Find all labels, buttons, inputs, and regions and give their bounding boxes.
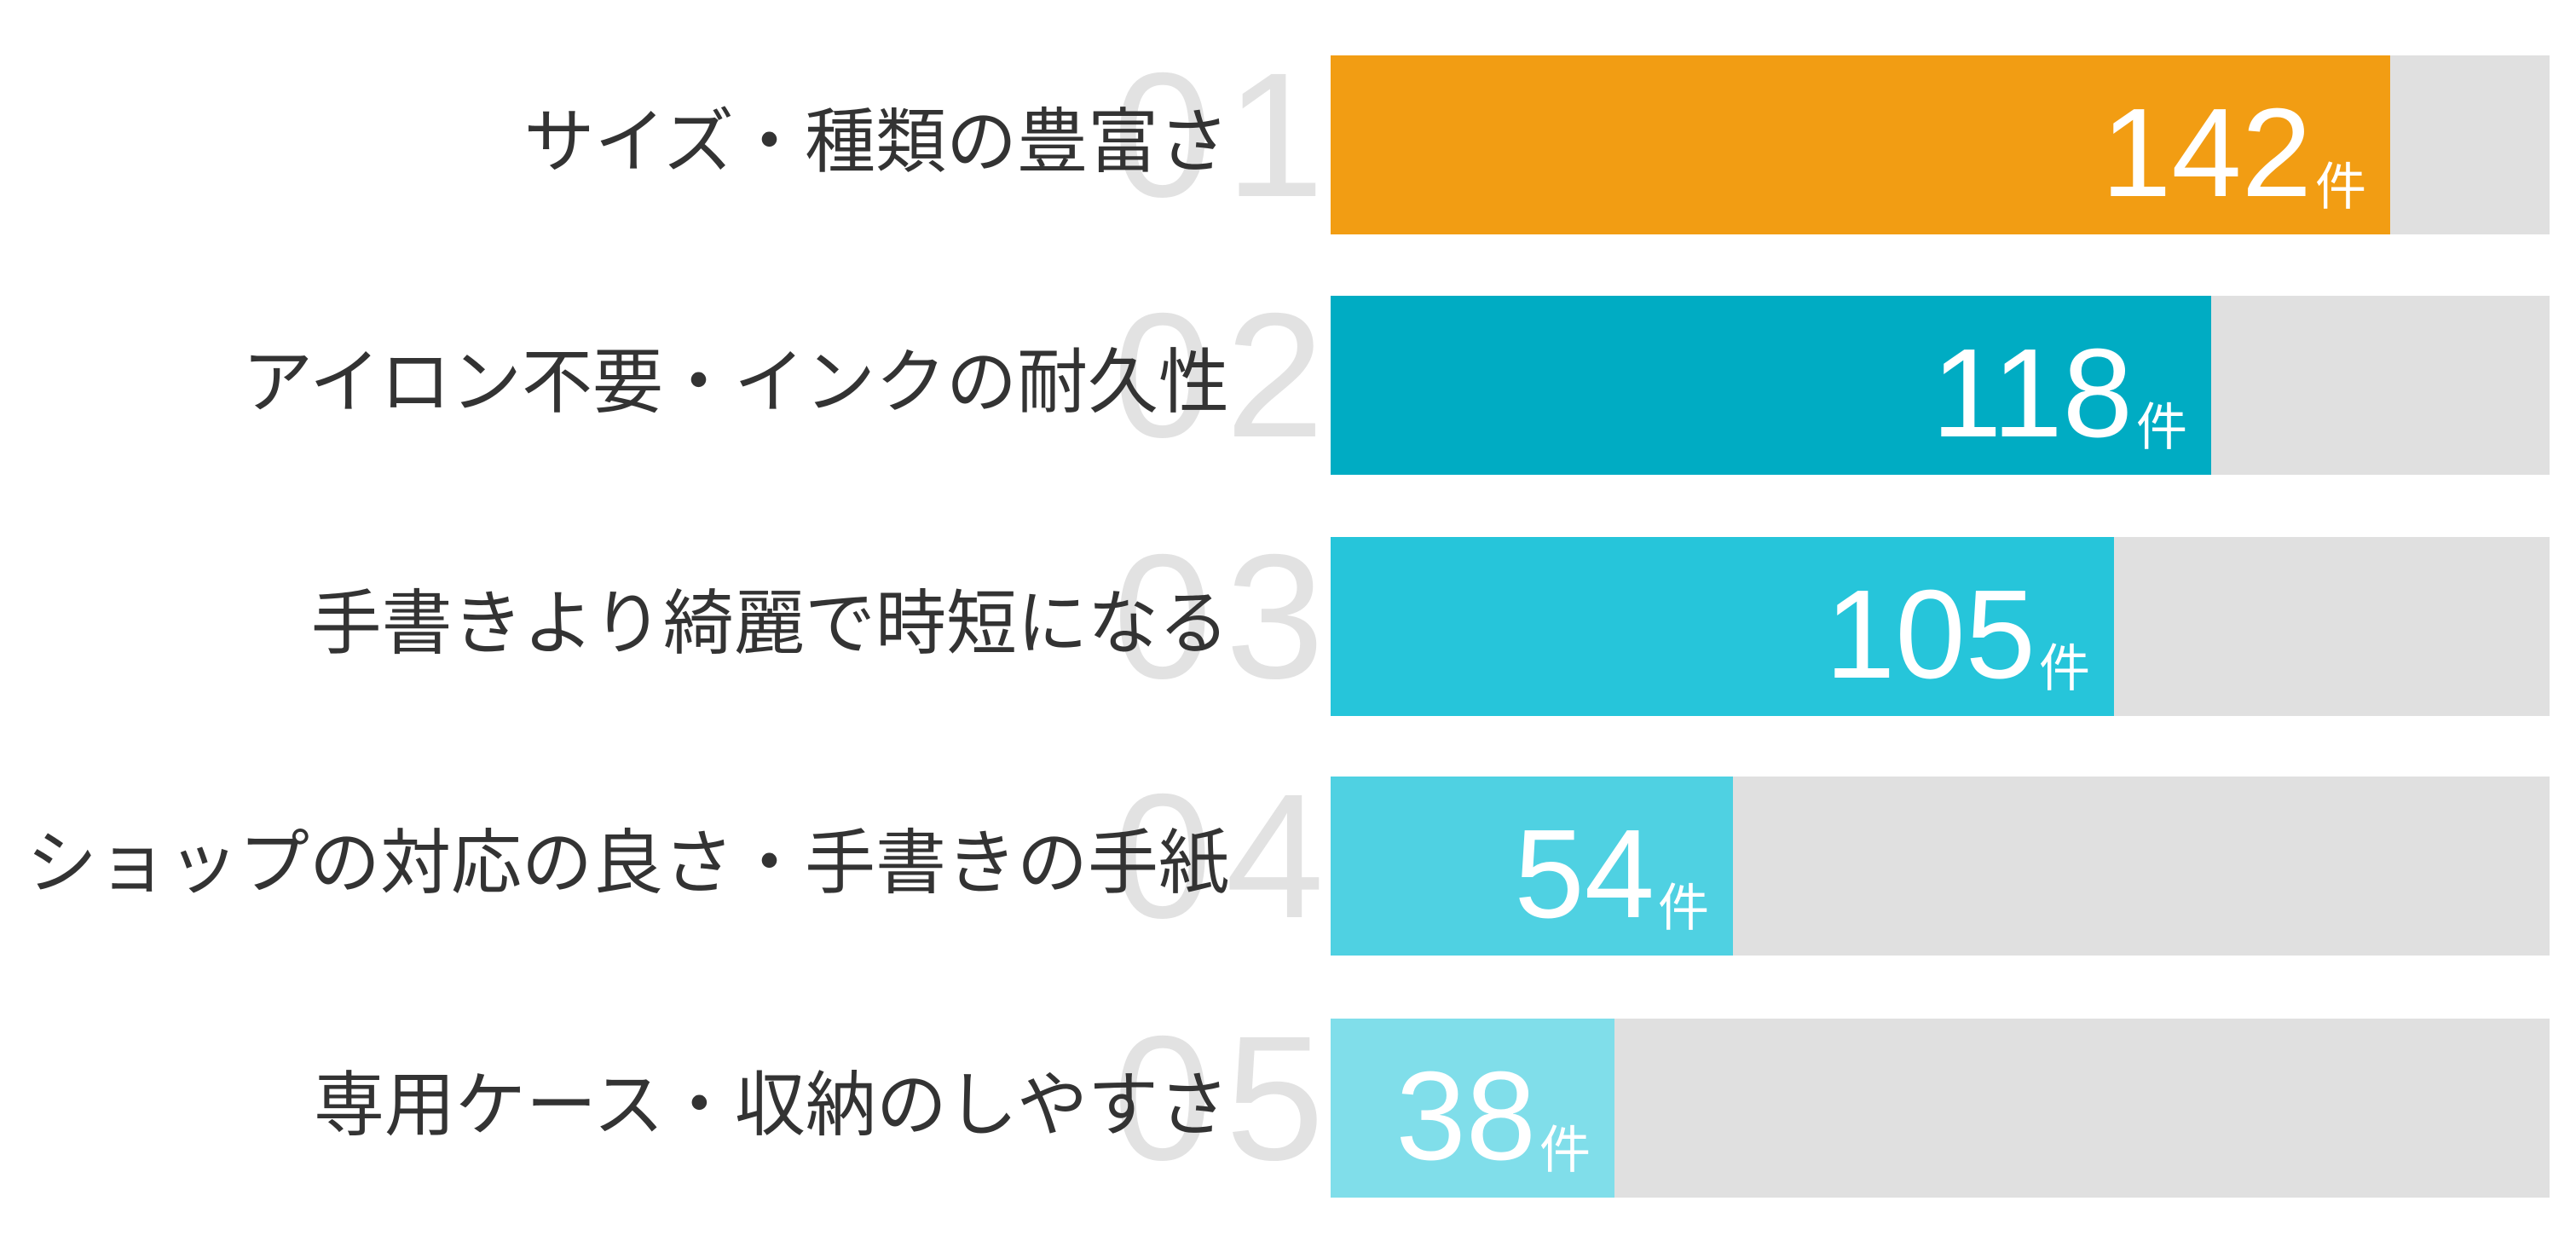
bar 5: 38件 [1395,1046,1591,1187]
rank number 05: 05 [1113,1000,1337,1198]
rank number 01: 01 [1113,37,1337,234]
label 5: 専用ケース・収納のしやすさ [314,1065,1229,1145]
label 2: アイロン不要・インクの耐久性 [242,343,1229,422]
rank number 03: 03 [1113,518,1337,716]
row 5 [314,1000,2550,1198]
label 4: ショップの対応の良さ・手書きの手紙 [26,823,1229,903]
bar 5 [1331,1019,2550,1198]
label 1: サイズ・種類の豊富さ [523,102,1229,182]
row 3 [311,518,2550,716]
bar 4 [1331,777,2550,956]
bar 1 [1331,55,2550,234]
bar 2 [1331,296,2550,475]
label 3: 手書きより綺麗で時短になる [311,584,1229,663]
rank number 02: 02 [1113,277,1337,475]
bar 2: 118件 [1932,323,2187,464]
row 2 [242,277,2550,475]
row 1 [523,37,2550,234]
bar 4: 54件 [1514,804,1709,944]
bar 3 [1331,537,2550,716]
bar 1: 142件 [2101,83,2366,223]
row 4 [26,758,2550,956]
rank number 04: 04 [1113,758,1337,956]
bar 3: 105件 [1825,564,2090,705]
